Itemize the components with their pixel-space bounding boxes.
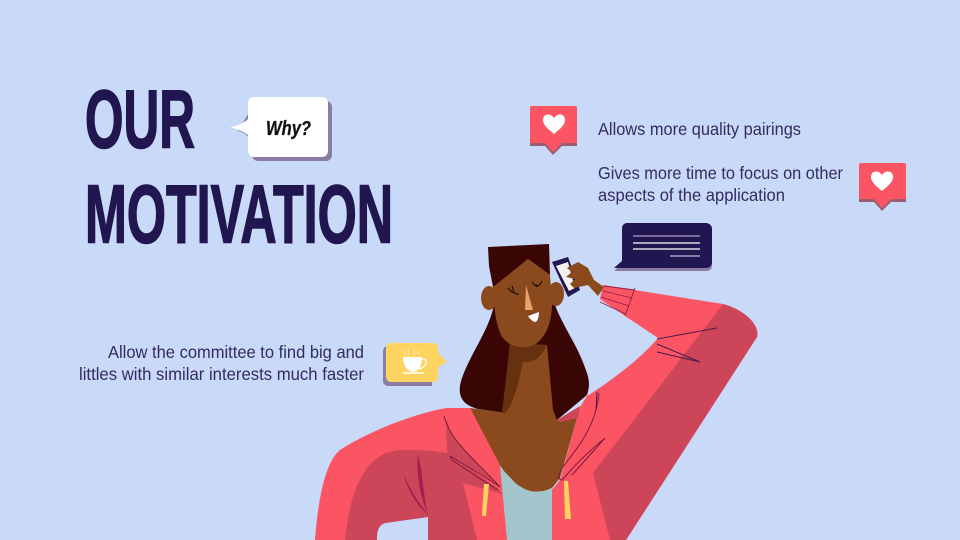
hair top — [488, 244, 550, 287]
undershirt — [500, 465, 553, 540]
neck shadow — [502, 343, 547, 413]
icon: heart bubble top — [530, 106, 577, 155]
drawstrings — [482, 484, 489, 516]
face — [493, 259, 552, 347]
mouth — [528, 312, 539, 322]
icon: coffee bubble — [383, 343, 447, 386]
text: committee: littles with similar interests much faster — [79, 364, 364, 384]
hood shade right — [557, 406, 580, 422]
nose — [525, 285, 533, 310]
collar lines right — [559, 393, 605, 480]
long hair back — [460, 295, 589, 420]
phone — [552, 257, 580, 297]
hoodie left side — [315, 408, 507, 540]
callout: why speech bubble: Why? — [266, 118, 311, 140]
right arm shade — [593, 304, 757, 540]
text: committee: Allow the committee to find big and — [108, 342, 364, 362]
text: more time to focus — [598, 163, 843, 205]
eyes — [508, 281, 542, 294]
icon: dark message bubble — [614, 223, 712, 271]
ears — [481, 286, 497, 310]
hood fold shade — [446, 420, 500, 486]
text: more time to focus: Gives more time to focus on other — [598, 163, 843, 183]
callout: why speech bubble — [230, 97, 332, 161]
sleeve creases left — [403, 454, 428, 515]
text: more time to focus: aspects of the application — [598, 185, 785, 205]
text: quality pairings: Allows more quality pairings — [598, 119, 801, 139]
text: committee — [79, 342, 364, 384]
cuff lines — [600, 286, 635, 316]
elbow creases — [657, 328, 717, 362]
collar lines left — [444, 416, 500, 490]
neck and chest — [470, 343, 577, 492]
hand — [566, 262, 604, 296]
illustration: woman with phone — [315, 244, 757, 540]
left sleeve shade — [345, 450, 503, 540]
title: MOTIVATION — [85, 168, 393, 260]
title — [85, 72, 393, 260]
title: OUR — [85, 72, 195, 166]
hoodie right arm — [552, 285, 757, 540]
icon: heart bubble right — [859, 163, 906, 211]
